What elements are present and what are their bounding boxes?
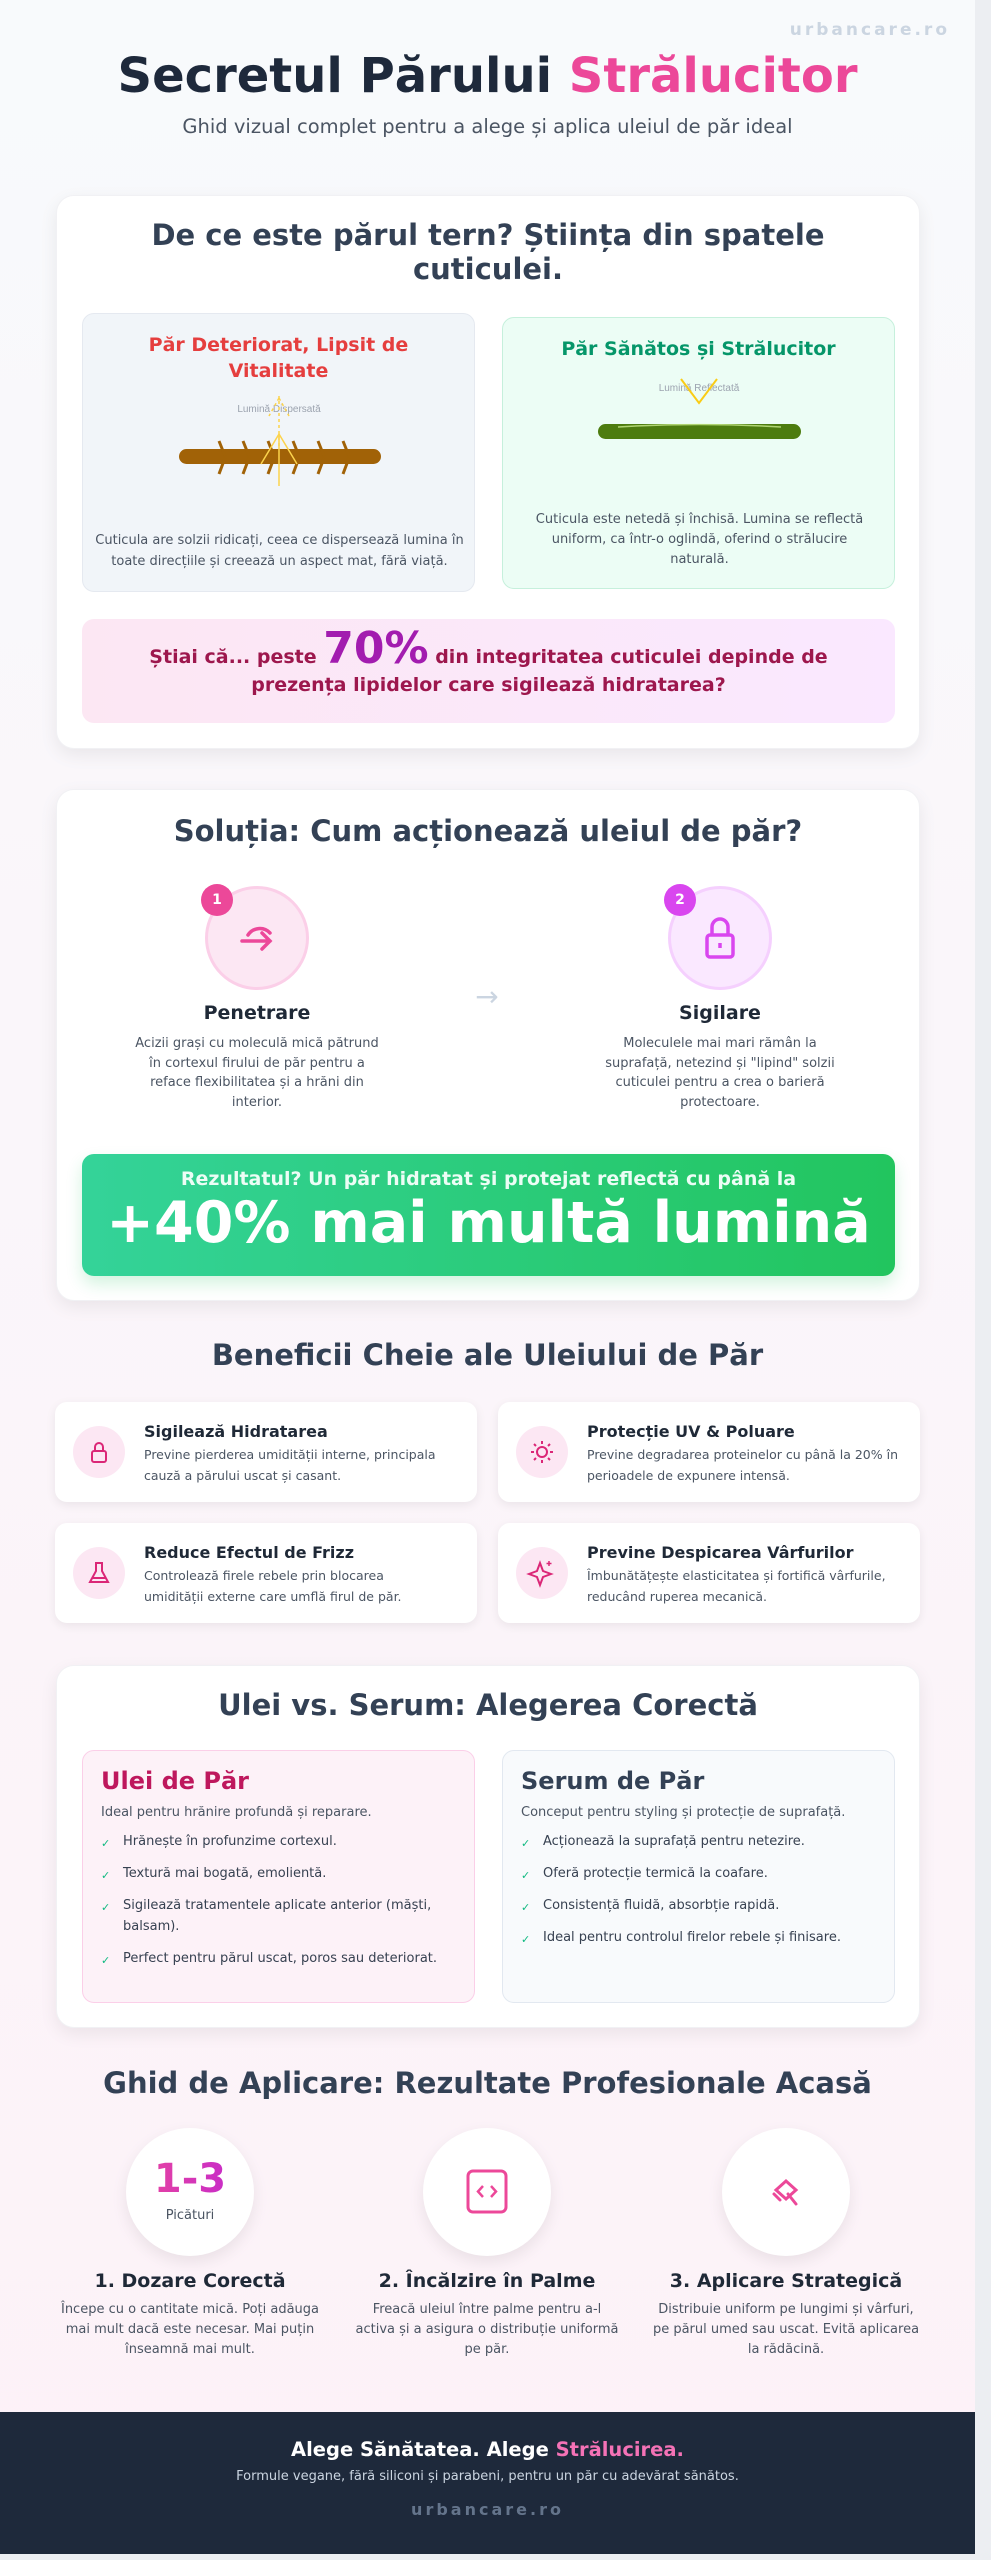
step: warm in palms — [356, 2128, 618, 2357]
icon: lock — [73, 1426, 125, 1478]
banner: +40% result — [82, 1154, 895, 1276]
text: penetration: Penetrare — [204, 1002, 310, 1024]
column: oil: Sigilează tratamentele aplicate anterior (măști, balsam). — [123, 1898, 431, 1934]
footer: Formule vegane, fără siliconi și parabeni, pentru un păr cu adevărat sănătos. — [236, 2469, 739, 2484]
column: serum: Conceput pentru styling și protecție de suprafață. — [521, 1805, 845, 1820]
panel: damaged hair — [82, 313, 475, 592]
footer: urbancare.ro — [411, 2500, 564, 2519]
banner: +40% result: Rezultatul? Un păr hidratat și protejat reflectă cu până la — [181, 1168, 796, 1190]
icon: application — [722, 2128, 850, 2256]
step: dosage: 1. Dozare Corectă — [94, 2270, 286, 2292]
step: strategic application: pe părul umed sau uscat. Evită aplicarea — [653, 2322, 919, 2337]
badge 1: 1 — [212, 892, 222, 908]
step: warm in palms: pe păr. — [465, 2342, 509, 2357]
heading: solution: Soluția: Cum acționează uleiul de păr? — [174, 814, 802, 848]
illustration: scattered light — [179, 396, 381, 486]
benefit: frizz: Reduce Efectul de Frizz — [144, 1543, 354, 1562]
step: penetration — [135, 884, 379, 1110]
step: sealing: Moleculele mai mari rămân la suprafață, netezind și "lipind" solzii cuticulei pentru a crea o barieră protectoare. — [605, 1036, 835, 1110]
column: oil: Textură mai bogată, emolientă. — [123, 1866, 326, 1881]
brand: urbancare.ro top: urbancare.ro — [790, 20, 950, 40]
icon: flask — [73, 1547, 125, 1599]
panel: solution — [56, 789, 920, 1301]
benefit: split ends: Previne Despicarea Vârfurilor — [587, 1543, 853, 1562]
benefit: UV protection: Protecție UV & Poluare — [587, 1422, 795, 1441]
panel: oil vs serum — [56, 1665, 920, 2028]
step: penetration: Acizii grași cu moleculă mică pătrund în cortexul firului de păr pentru a reface flexibilitatea și a hrăni din interior. — [135, 1036, 379, 1110]
heading: why hair is dull: De ce este părul tern? Știința din spatele — [151, 218, 825, 252]
heading: damaged — [149, 334, 408, 382]
step: warm in palms: activa și a asigura o distribuție uniformă — [356, 2322, 618, 2337]
heading: key benefits: Beneficii Cheie ale Uleiului de Păr — [212, 1338, 763, 1372]
heading: damaged: Vitalitate — [229, 360, 328, 382]
badge 1 — [201, 884, 233, 916]
footer — [0, 2412, 975, 2554]
icon: sparkles — [516, 1547, 568, 1599]
column: serum — [502, 1750, 895, 2003]
arrow: step to step: → — [475, 980, 499, 1013]
step: strategic application — [653, 2128, 919, 2357]
column: serum: Acționează la suprafață pentru netezire. — [543, 1834, 805, 1849]
step: warm in palms: 2. Încălzire în Palme — [379, 2270, 595, 2292]
step: strategic application: Distribuie uniform pe lungimi și vârfuri, — [658, 2302, 914, 2317]
benefit: frizz: umidității externe care umflă firul de păr. — [144, 1589, 402, 1604]
panel: healthy hair — [502, 317, 895, 589]
badge 2: 2 — [675, 892, 685, 908]
icon: lock — [668, 886, 772, 990]
heading: why hair is dull — [151, 218, 825, 286]
icon: 1-3 drops — [126, 2128, 254, 2256]
benefit: UV protection — [498, 1402, 920, 1502]
column: serum: Consistență fluidă, absorbție rapidă. — [543, 1898, 779, 1913]
column: oil: Perfect pentru părul uscat, poros sau deteriorat. — [123, 1951, 437, 1966]
step: warm in palms: Freacă uleiul între palme pentru a-l — [373, 2302, 601, 2317]
step: sealing — [605, 884, 835, 1110]
text: sealing: Sigilare — [679, 1002, 761, 1024]
column: serum: Oferă protecție termică la coafare. — [543, 1866, 768, 1881]
panel: cuticle science — [56, 195, 920, 749]
heading: damaged: Păr Deteriorat, Lipsit de — [149, 334, 408, 356]
illustration: reflected light — [598, 378, 801, 439]
callout: 70% fact: Știai că... peste 70% din integritatea cuticulei depinde de — [149, 623, 828, 674]
heading: oil vs serum: Ulei vs. Serum: Alegerea Corectă — [218, 1688, 758, 1722]
text: healthy description: Cuticula este netedă și închisă. Lumina se reflectă uniform, ca într-o oglindă, oferind o strălucire naturală. — [536, 512, 863, 567]
text: damaged description: Cuticula are solzii ridicați, ceea ce dispersează lumina în toate direcțiile și creează un aspect mat, fără viață. — [95, 533, 464, 569]
benefit: split ends — [498, 1523, 920, 1623]
step: strategic application: la rădăcină. — [748, 2342, 824, 2357]
icon: 1-3 drops: 1-3 — [154, 2156, 226, 2202]
column: oil: Ulei de Păr — [101, 1767, 249, 1795]
step: strategic application: 3. Aplicare Strategică — [670, 2270, 902, 2292]
heading: healthy: Păr Sănătos și Strălucitor — [561, 338, 836, 360]
callout: 70% fact: prezența lipidelor care sigilează hidratarea? — [251, 674, 726, 696]
step: dosage — [61, 2128, 319, 2357]
column: oil: Hrănește în profunzime cortexul. — [123, 1834, 337, 1849]
benefit: frizz — [55, 1523, 477, 1623]
illustration: scattered light: Lumină Dispersată — [237, 404, 321, 415]
icon: sun — [516, 1426, 568, 1478]
illustration: reflected light: Lumină Reflectată — [659, 383, 740, 394]
icon: penetration arrow — [205, 886, 309, 990]
callout: 70% fact — [82, 619, 895, 723]
step: dosage: Începe cu o cantitate mică. Poți adăuga mai mult dacă este necesar. Mai puțin înseamnă mai mult. — [61, 2302, 319, 2357]
banner: +40% result: +40% mai multă lumină — [106, 1190, 871, 1256]
benefit: UV protection: Previne degradarea proteinelor cu până la 20% în perioadele de expunere intensă. — [587, 1447, 898, 1483]
benefit: seals hydration: Previne pierderea umidității interne, principala cauză a părului uscat și casant. — [144, 1447, 436, 1483]
column: oil — [82, 1750, 475, 2003]
heading: why hair is dull: cuticulei. — [413, 252, 563, 286]
title: Secretul Părului Strălucitor — [118, 48, 858, 104]
icon: palms — [423, 2128, 551, 2256]
subtitle: Ghid vizual complet pentru a alege și aplica uleiul de păr ideal — [182, 115, 793, 138]
heading: application guide: Ghid de Aplicare: Rezultate Profesionale Acasă — [103, 2066, 872, 2100]
column: oil: Ideal pentru hrănire profundă și reparare. — [101, 1805, 372, 1820]
benefit: seals hydration: Sigilează Hidratarea — [144, 1422, 328, 1441]
benefit: frizz: Controlează firele rebele prin blocarea — [144, 1568, 384, 1583]
benefit: split ends: Îmbunătățește elasticitatea și fortifică vârfurile, reducând ruperea mecanică. — [587, 1568, 886, 1604]
icon: 1-3 drops: Picături — [166, 2208, 214, 2223]
badge 2 — [664, 884, 696, 916]
column: serum: Ideal pentru controlul firelor rebele și finisare. — [543, 1930, 841, 1945]
column: serum: Serum de Păr — [521, 1767, 704, 1795]
benefit: seals hydration — [55, 1402, 477, 1502]
footer: Alege Sănătatea. Alege Strălucirea. — [291, 2438, 684, 2461]
